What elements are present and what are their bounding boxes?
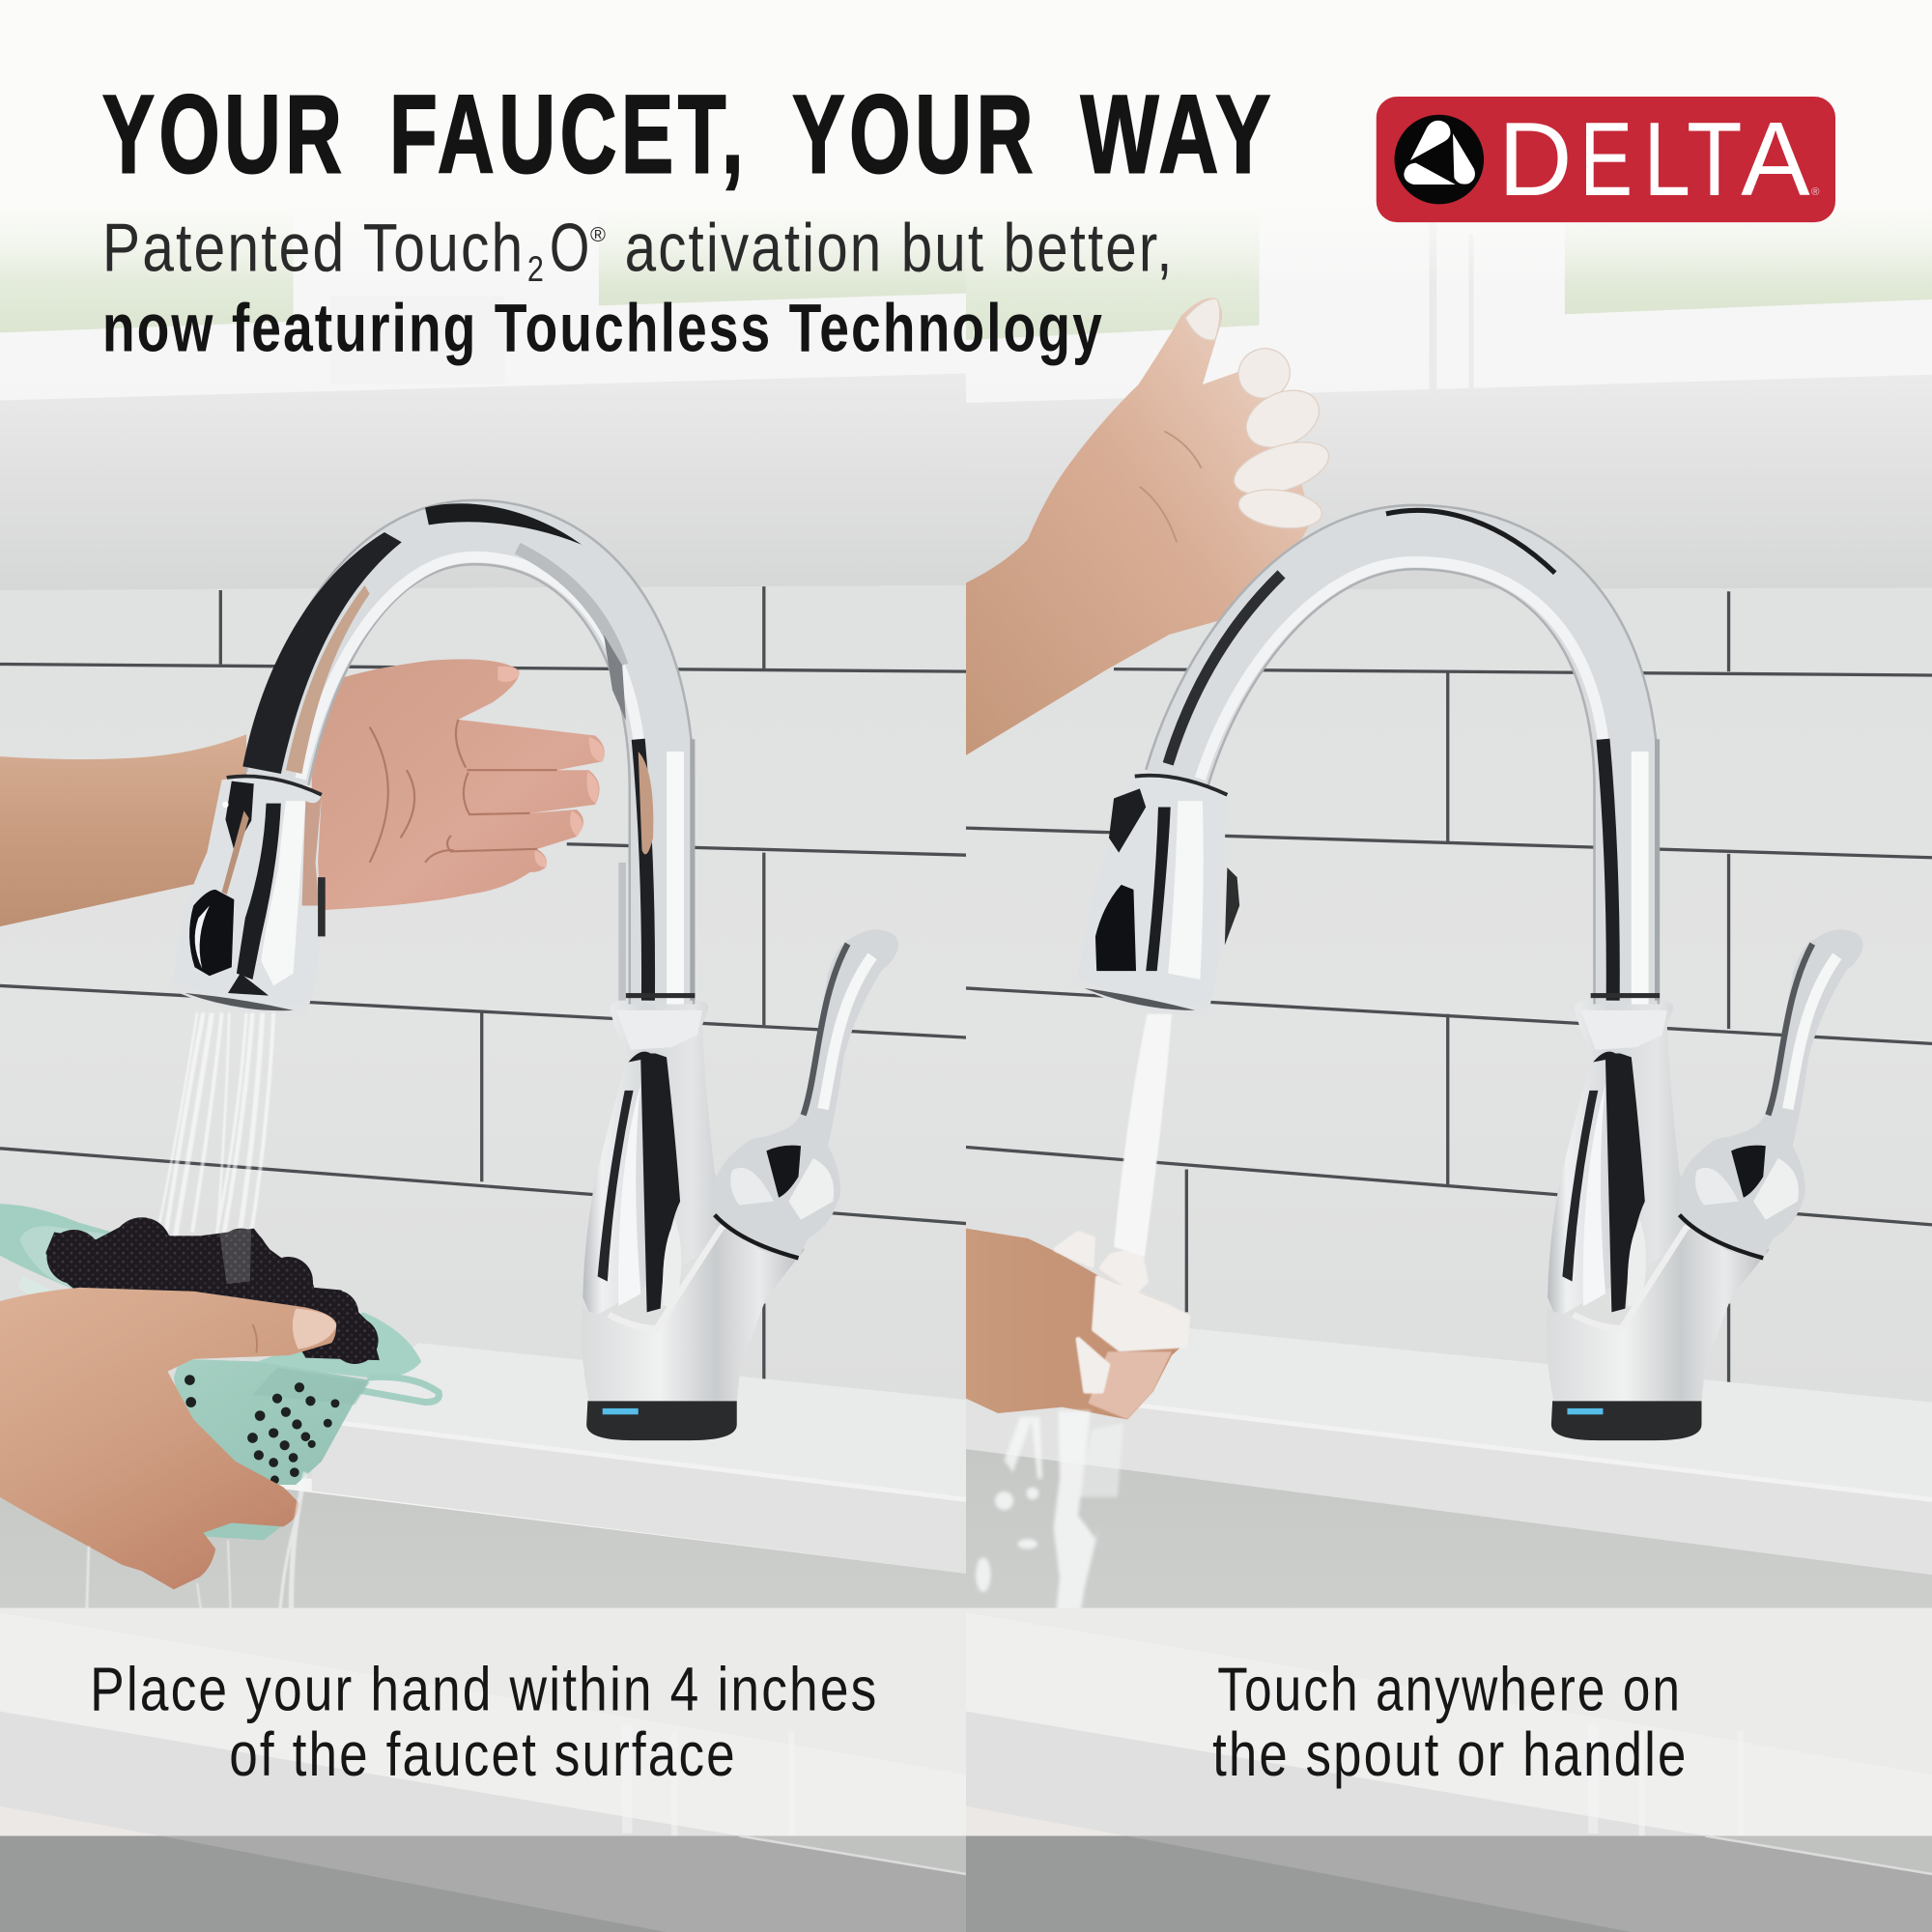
colander handle loop [357,1377,439,1403]
title [102,73,1275,197]
sink basin, left [0,1490,966,1607]
caption: left: Place your hand within 4 inches [90,1654,878,1723]
colander left rim [0,1204,112,1293]
title: YOUR [792,73,1037,197]
subtitle line 1: 2 [527,249,546,289]
lever handle [711,929,898,1258]
spout, right [1168,510,1658,1005]
caption: right: Touch anywhere on [1217,1654,1682,1723]
logo wordmark: D [1498,100,1573,217]
caption: left [90,1654,878,1789]
water splash, right [976,1410,1123,1627]
panel: right kitchen scene [966,241,1932,1607]
spout dark reflections [242,503,653,854]
spout collar, right [1591,993,1660,998]
blackberries [45,1217,380,1364]
logo: Delta [1377,97,1835,222]
water spray, left [157,1012,273,1238]
colander side wall behind rim [19,1275,50,1294]
logo wordmark [1498,100,1810,217]
tile wall, left [0,585,966,1479]
colander with blackberries [0,1204,439,1540]
subtitle line 1: ® [590,222,609,246]
hand: holding colander [0,1288,336,1589]
sink basin, right [966,1449,1932,1614]
faucet base and lever, right [1547,929,1863,1440]
spout [277,532,693,1005]
logo wordmark: T [1687,100,1743,217]
water stream, right [1114,1014,1172,1257]
caption band: left [0,1608,966,1836]
colander right rim [180,1312,421,1378]
title: FAUCET, [389,73,748,197]
bottom grey strip: left [0,1836,966,1932]
colander bottom lip [203,1522,281,1540]
title: YOUR [102,73,346,197]
hand: lathered, touching spout [966,298,1335,755]
logo wordmark: L [1644,100,1690,217]
upper wall, left [0,373,966,591]
logo: Delta: ® [1811,186,1820,198]
caption: right [1212,1654,1688,1789]
lower base [582,1212,805,1401]
subtitle line 1: Patented Touch [102,210,525,286]
body reflections [598,1010,702,1312]
top white fade over window [0,0,1932,283]
colander holes [185,1375,339,1484]
subtitle line 1: activation but better, [625,210,1175,286]
subtitle line 1 [102,210,1175,289]
countertop, left [312,1343,966,1574]
caption: right: the spout or handle [1212,1719,1688,1789]
spray head trigger [1225,867,1239,945]
hand and arm: reaching under the spout [0,659,605,926]
faucet base ring [586,1401,737,1440]
faucet, right [1070,510,1863,1440]
faucet body [582,1003,721,1314]
colander bowl [174,1359,370,1485]
hand: lathered, lower [966,1229,1188,1419]
window panes and frame, right [966,241,1932,389]
subtitle line 1: O [550,210,591,286]
tile wall, right [966,587,1932,1479]
spray head, right [1070,775,1239,1015]
countertop, right [966,1328,1932,1575]
logo wordmark: A [1741,100,1810,217]
logo wordmark: E [1579,100,1633,217]
faucet, left [167,503,898,1440]
logo mark [1394,115,1484,204]
bottom grey strip: right [966,1836,1932,1932]
title: WAY [1081,73,1275,197]
foamed fingers [1185,298,1335,533]
caption: left: of the faucet surface [229,1719,737,1789]
caption band: right [966,1608,1932,1836]
spray head [167,777,326,1016]
upper wall, right [966,375,1932,591]
window panes and frame, left [0,240,966,332]
spout collar [626,993,695,998]
water on berries [219,1227,251,1284]
lather [1056,1234,1188,1391]
panel: left kitchen scene [0,240,966,1607]
draining water, left [85,1471,308,1607]
subtitle line 2: now featuring Touchless Technology [102,290,1104,366]
